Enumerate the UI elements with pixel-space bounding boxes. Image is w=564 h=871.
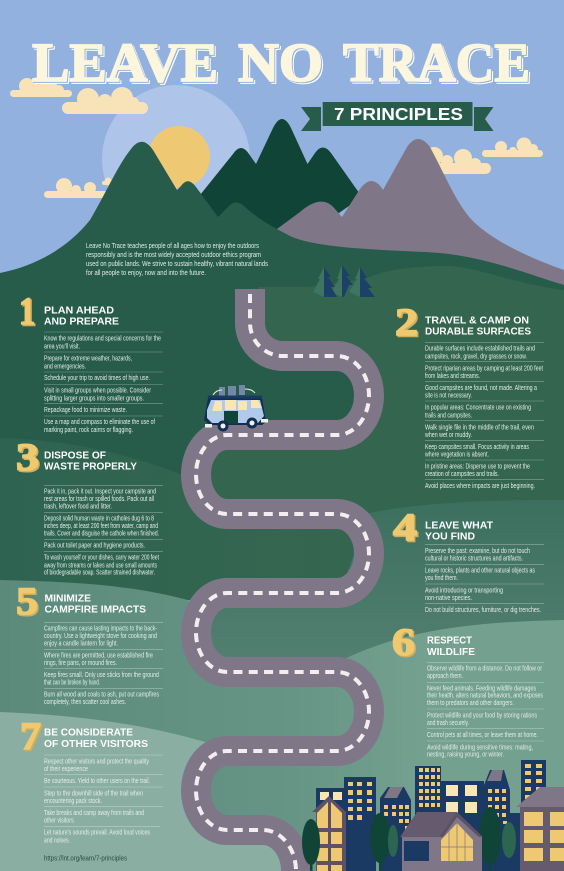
- section 3: dispose of waste: of biodegradable soap. Scatter strained dishwater.: [44, 568, 155, 577]
- winding road: [196, 289, 369, 871]
- section 1: plan ahead: Use a map and compass to eliminate the use of: [44, 417, 155, 426]
- section 5: minimize campfire impacts: Burn all wood and coals to ash, put out campfires: [44, 690, 159, 699]
- lit windows: [320, 785, 477, 813]
- section 7: be considerate: encountering pack stock.: [44, 796, 102, 805]
- section 2: travel and camp: DURABLE SURFACES: [425, 326, 531, 337]
- pine trees: [313, 265, 375, 297]
- section 6: respect wildlife: nesting, raising young, or winter.: [427, 750, 504, 759]
- section 3: dispose of waste: trash, leftover food and litter.: [44, 501, 112, 510]
- mountains: [0, 119, 564, 600]
- section 7: be considerate: Be courteous. Yield to other users on the trail.: [44, 776, 150, 785]
- section 4: leave what you find: Preserve the past: examine, but do not touch: [425, 546, 530, 555]
- title: LEAVE: [32, 32, 218, 93]
- banner: 7 principles: [301, 102, 494, 131]
- section 7: be considerate: Let nature's sounds prevail. Avoid loud voices: [44, 828, 150, 837]
- green mountain: [0, 142, 564, 600]
- section 2: travel and camp: from lakes and streams.: [425, 371, 480, 380]
- section 5: minimize campfire impacts: completely, then scatter cool ashes.: [44, 697, 126, 706]
- banner: 7 principles: 7 PRINCIPLES: [334, 104, 463, 124]
- section 5: minimize campfire impacts: Keep fires small. Only use sticks from the ground: [44, 670, 159, 679]
- section 6: respect wildlife: [392, 621, 544, 759]
- town skyline: [302, 760, 564, 871]
- section 1: plan ahead: Repackage food to minimize waste.: [44, 405, 127, 414]
- section 5: minimize campfire impacts: 5: [16, 580, 38, 623]
- section 3: dispose of waste: DISPOSE OF: [44, 450, 106, 461]
- title: NO: [238, 32, 323, 93]
- section 6: respect wildlife: 6: [392, 621, 415, 664]
- section 2: travel and camp: creation of campsites and trails.: [425, 469, 499, 478]
- section 1: plan ahead: Prepare for extreme weather, hazards,: [44, 353, 132, 362]
- section 6: respect wildlife: approach them.: [427, 671, 463, 680]
- section 6: respect wildlife: Avoid wildlife during sensitive times: mating,: [427, 742, 533, 751]
- section 4: leave what you find: Avoid introducing or transporting: [425, 585, 503, 594]
- section 5: minimize campfire impacts: that can be broken by hand.: [44, 678, 100, 687]
- section 1: plan ahead: and emergencies.: [44, 361, 86, 370]
- section 4: leave what you find: you find them.: [425, 573, 458, 582]
- section 7: be considerate: [20, 715, 163, 844]
- section 2: travel and camp: when wet or muddy.: [424, 430, 472, 439]
- section 6: respect wildlife: RESPECT: [427, 636, 472, 647]
- section 1: plan ahead: Visit in small groups when possible. Consider: [44, 385, 151, 394]
- intro text: responsibly and is the most widely accepted outdoor ethics program: [86, 250, 261, 259]
- section 1: plan ahead: Schedule your trip to avoid times of high use.: [44, 373, 150, 382]
- section 3: dispose of waste: rest areas for trash or spilled foods. Pack out all: [44, 494, 154, 503]
- section 2: travel and camp: trails and campsites.: [425, 410, 472, 419]
- dark back mountain range: [196, 119, 362, 240]
- section 6: respect wildlife: them to predators and other dangers.: [427, 698, 514, 707]
- section 6: respect wildlife: and trash securely.: [427, 718, 469, 727]
- section 7: be considerate: of their experience: [44, 764, 88, 773]
- section 7: be considerate: other visitors.: [44, 815, 75, 824]
- intro text: for all people to enjoy, now and into the future.: [86, 268, 206, 277]
- section 7: be considerate: Take breaks and camp away from trails and: [44, 808, 144, 817]
- section 7: be considerate: and noises.: [44, 835, 70, 844]
- section 7: be considerate: OF OTHER VISITORS: [44, 739, 148, 750]
- section 3: dispose of waste: inches deep, at least 200 feet from water, camp and: [44, 521, 158, 530]
- centre house: [400, 812, 483, 871]
- section 1: plan ahead: 1: [19, 290, 35, 333]
- section 4: leave what you find: LEAVE WHAT: [425, 520, 493, 531]
- section 3: dispose of waste: Pack out toilet paper and hygiene products.: [44, 541, 145, 550]
- section 4: leave what you find: YOU FIND: [425, 531, 475, 542]
- title: [32, 32, 530, 93]
- section 3: dispose of waste: [16, 436, 163, 577]
- intro text: [86, 241, 268, 277]
- section 5: minimize campfire impacts: enjoy a candle lantern for light.: [44, 638, 118, 647]
- section 6: respect wildlife: WILDLIFE: [427, 647, 475, 658]
- trees: [302, 807, 516, 871]
- section 2: travel and camp: 2: [395, 301, 418, 344]
- camper van: [204, 385, 268, 432]
- section 1: plan ahead: area you'll visit.: [44, 341, 80, 350]
- section 1: plan ahead: AND PREPARE: [44, 317, 119, 328]
- section 1: plan ahead: PLAN AHEAD: [44, 305, 114, 316]
- section 3: dispose of waste: 3: [16, 436, 39, 479]
- section 1: plan ahead: splitting larger groups into smaller groups.: [44, 393, 144, 402]
- right house: [516, 787, 564, 871]
- intro text: Leave No Trace teaches people of all ages how to enjoy the outdoors: [86, 241, 259, 250]
- section 7: be considerate: BE CONSIDERATE: [44, 728, 133, 739]
- section 2: travel and camp: [395, 301, 544, 490]
- section 1: plan ahead: marking paint, rock cairns or flagging.: [44, 425, 133, 434]
- section 2: travel and camp: site is not necessary.: [425, 391, 472, 400]
- section 5: minimize campfire impacts: CAMPFIRE IMPACTS: [44, 604, 146, 615]
- section 4: leave what you find: [393, 506, 544, 614]
- section 1: plan ahead: Know the regulations and special concerns for the: [44, 334, 161, 343]
- section 3: dispose of waste: WASTE PROPERLY: [44, 461, 137, 472]
- section 3: dispose of waste: trails. Cover and disguise the cathole when finished.: [44, 529, 159, 538]
- section 3: dispose of waste: Pack it in, pack it out. Inspect your campsite and: [44, 487, 156, 496]
- section 2: travel and camp: TRAVEL & CAMP ON: [425, 316, 529, 327]
- section 3: dispose of waste: Deposit solid human waste in catholes dug 6 to 8: [44, 513, 154, 522]
- section 7: be considerate: 7: [20, 715, 41, 758]
- section 5: minimize campfire impacts: rings, fire pans, or mound fires.: [44, 658, 117, 667]
- section 2: travel and camp: In pristine areas: Disperse use to prevent the: [425, 461, 530, 470]
- grey mountain: [262, 139, 564, 295]
- section 5: minimize campfire impacts: [16, 580, 163, 706]
- sun with halo: [102, 85, 250, 233]
- section 4: leave what you find: 4: [393, 506, 417, 549]
- section 3: dispose of waste: To wash yourself or your dishes, carry water 200 feet: [44, 553, 159, 562]
- source url: https://lnt.org/learn/7-principles: [44, 854, 127, 862]
- clouds: [10, 78, 543, 198]
- section 5: minimize campfire impacts: Where fires are permitted, use established fire: [44, 650, 153, 659]
- title: TRACE: [343, 32, 530, 93]
- navy apartment buildings: [316, 760, 546, 871]
- left gabled house: [312, 796, 346, 871]
- section 7: be considerate: Step to the downhill side of the trail when: [44, 788, 143, 797]
- section 5: minimize campfire impacts: MINIMIZE: [44, 593, 91, 604]
- intro text: used on public lands. We strive to sustain healthy, vibrant natural lands: [86, 259, 268, 268]
- sloped rooftops: [384, 770, 503, 798]
- section 5: minimize campfire impacts: Campfires can cause lasting impacts to the back-: [44, 623, 157, 632]
- section 3: dispose of waste: away from streams or lakes and use small amounts: [44, 560, 157, 569]
- section 5: minimize campfire impacts: country. Use a lightweight stove for cooking and: [44, 631, 157, 640]
- section 7: be considerate: Respect other visitors and protect the quality: [44, 756, 149, 765]
- ground layers: [0, 266, 564, 871]
- section 4: leave what you find: cultural or historic structures and artifacts.: [425, 553, 523, 562]
- section 4: leave what you find: non-native species.: [425, 593, 472, 602]
- section 2: travel and camp: where vegetation is absent.: [424, 450, 489, 459]
- section 1: plan ahead: [19, 290, 163, 434]
